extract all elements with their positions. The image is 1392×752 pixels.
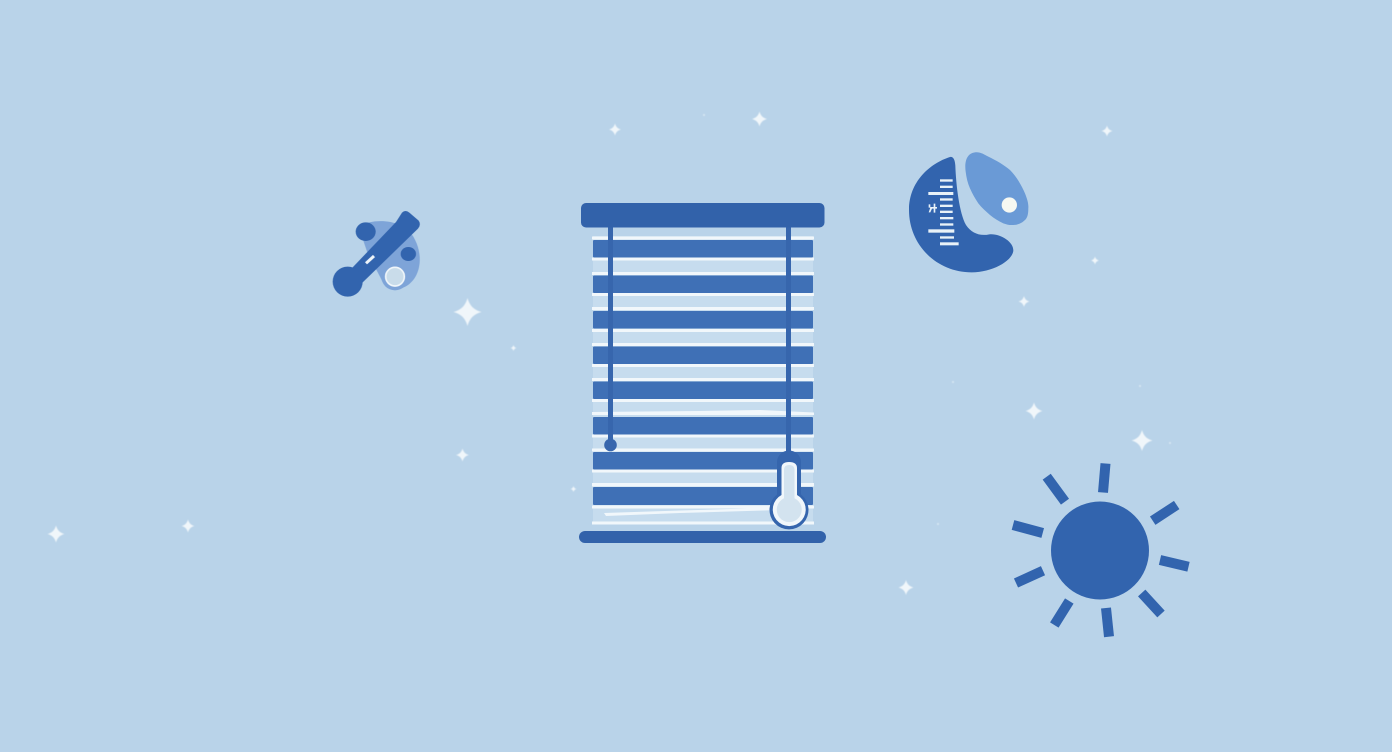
cords <box>604 226 791 454</box>
icon: gauge pie chart <box>909 152 1028 272</box>
slats <box>593 240 813 505</box>
dark pie segment <box>909 157 1013 272</box>
icon: sun <box>1013 464 1188 637</box>
pie dot <box>1002 197 1017 213</box>
icon: thermometer <box>770 450 809 529</box>
palette <box>358 221 420 290</box>
palette wells <box>356 222 376 241</box>
brush <box>333 211 420 297</box>
head rail <box>581 203 824 228</box>
palette thumb hole <box>386 267 404 286</box>
sun disc <box>1051 502 1149 600</box>
slat highlights <box>592 236 814 524</box>
icon: paint palette and brush <box>333 211 420 297</box>
light pie segment <box>965 152 1028 225</box>
sun rays <box>1013 464 1188 637</box>
bottom rail <box>579 531 826 543</box>
window backing <box>593 236 813 524</box>
icon: window blinds <box>579 203 826 543</box>
scale ticks <box>928 179 959 245</box>
sparkles <box>48 112 1171 595</box>
